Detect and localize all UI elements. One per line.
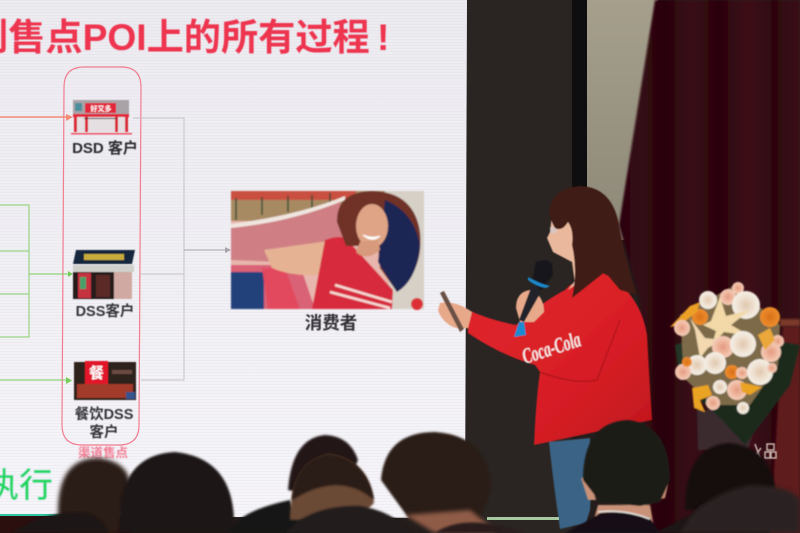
dark panel beside the screen	[466, 0, 587, 533]
label: restaurant DSS customer	[75, 405, 134, 441]
label: channel outlets: 渠道售点	[78, 445, 128, 460]
icon: DSD store	[71, 100, 132, 134]
curtain	[619, 0, 800, 533]
icon: DSD store: 好又多	[90, 104, 112, 113]
flower bouquet	[670, 282, 800, 450]
wood panel at right	[770, 319, 800, 533]
logo on sleeve: Coca-Cola	[519, 326, 584, 369]
presenter	[438, 186, 652, 529]
jacket	[468, 273, 652, 445]
head: far left	[58, 458, 130, 533]
head: far right foreground	[680, 485, 800, 533]
slide title: !	[377, 16, 389, 58]
head: lower foreground dark	[285, 506, 410, 533]
jeans	[549, 438, 591, 529]
icon: restaurant DSS store: 餐	[89, 364, 104, 382]
dark floor strip	[0, 516, 130, 533]
body: dark suit behind	[230, 500, 300, 533]
label: consumer: 消费者	[305, 313, 357, 333]
neck and face	[547, 200, 590, 290]
head: central large	[381, 432, 491, 525]
colored strip below the panel	[487, 517, 559, 520]
hair	[549, 186, 637, 298]
head: dark foreground center	[435, 522, 525, 533]
man with white collar	[565, 420, 670, 533]
icon: restaurant DSS store	[74, 361, 136, 400]
head: cropped hair	[290, 454, 374, 520]
leaves	[675, 340, 800, 445]
glasses	[550, 227, 557, 233]
vase	[697, 410, 760, 450]
hand holding microphone	[516, 290, 544, 322]
pink arrow to DSD store	[0, 114, 73, 121]
projection screen	[0, 0, 467, 518]
label: DSS customer: DSS客户	[76, 302, 134, 320]
sleeve fold	[540, 320, 620, 381]
channel outlet rounded frame	[62, 67, 141, 445]
head: right dark	[685, 443, 775, 510]
head: dark hair behind	[288, 435, 358, 500]
head: large front left	[120, 452, 234, 533]
label: DSD customer: DSD 客户	[72, 139, 138, 157]
label: restaurant DSS customer: 客户	[90, 423, 118, 441]
hand with remote clicker	[438, 291, 472, 332]
green connector lines	[0, 205, 73, 384]
icon: DSS store	[73, 250, 135, 299]
audience heads	[12, 420, 800, 533]
shoulder: far left	[12, 513, 108, 533]
bouquet base	[680, 285, 780, 405]
grey connectors to consumer	[133, 118, 231, 380]
body: right dark	[655, 495, 770, 533]
microphone	[514, 260, 553, 337]
ear and neck: central	[405, 510, 495, 533]
blossoms	[670, 282, 784, 414]
logo mark on backdrop	[755, 444, 776, 458]
label: restaurant DSS customer: 餐饮DSS	[75, 405, 134, 423]
consumer photo	[231, 191, 424, 310]
